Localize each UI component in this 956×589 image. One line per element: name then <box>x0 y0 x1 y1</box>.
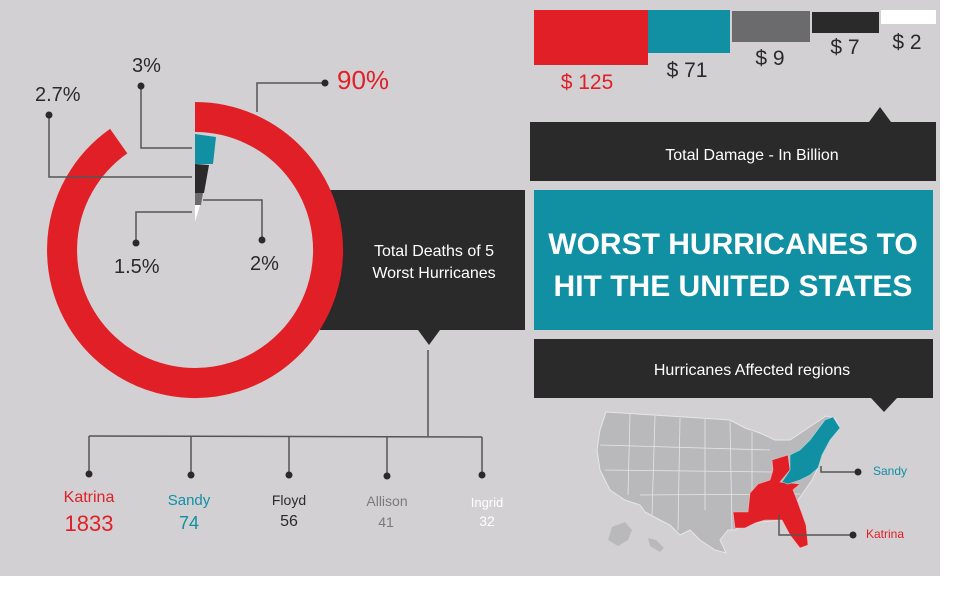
bar chart: total damage: $ 2 <box>892 31 922 54</box>
bar chart: total damage <box>534 10 936 94</box>
callout: Sandy: Sandy <box>873 464 907 478</box>
label box: affected regions <box>534 339 933 412</box>
label box: total damage <box>530 107 936 181</box>
callout: Sandy <box>821 464 907 478</box>
label box: total deaths: Worst Hurricanes <box>372 265 496 282</box>
title box <box>534 190 933 330</box>
tree: deaths per hurricane: 56 <box>280 513 298 530</box>
label box: total deaths: Total Deaths of 5 <box>374 243 494 260</box>
tree: deaths per hurricane: 41 <box>378 514 394 530</box>
tree: deaths per hurricane: Allison <box>366 493 408 509</box>
tree: deaths per hurricane: Ingrid <box>471 495 503 510</box>
tree: deaths per hurricane: 74 <box>179 513 199 533</box>
callout: 3%: 3% <box>132 55 161 77</box>
tree: deaths per hurricane: 1833 <box>65 511 113 536</box>
callout: 90%: 90% <box>337 65 389 95</box>
bar chart: total damage: $ 7 <box>830 36 860 59</box>
title box: WORST HURRICANES TO <box>548 228 918 261</box>
title box: HIT THE UNITED STATES <box>554 270 912 303</box>
tree: deaths per hurricane: Katrina <box>64 489 114 506</box>
bar chart: total damage: $ 125 <box>561 71 613 94</box>
label box: total damage: Total Damage - In Billion <box>665 147 839 164</box>
callout: 2.7% <box>35 84 192 177</box>
callout: 2%: 2% <box>250 253 279 275</box>
callout: 2% <box>203 200 279 275</box>
bar chart: total damage: $ 71 <box>667 59 707 82</box>
map: affected regions <box>597 412 840 553</box>
callout: 1.5%: 1.5% <box>114 256 160 278</box>
donut chart: death share <box>62 117 328 383</box>
label box: affected regions: Hurricanes Affected regions <box>654 362 850 379</box>
tree: deaths per hurricane: Floyd <box>272 492 306 508</box>
tree: deaths per hurricane: 32 <box>479 513 495 529</box>
callout: 2.7%: 2.7% <box>35 84 81 106</box>
label box: total deaths <box>320 190 525 345</box>
tree: deaths per hurricane: Sandy <box>168 492 211 509</box>
callout: Katrina <box>779 515 904 541</box>
callout: 90% <box>257 65 389 112</box>
tree: deaths per hurricane <box>64 350 503 536</box>
callout: 1.5% <box>114 212 192 278</box>
callout: Katrina: Katrina <box>866 527 904 541</box>
callout: 3% <box>132 55 192 148</box>
bar chart: total damage: $ 9 <box>755 47 785 70</box>
